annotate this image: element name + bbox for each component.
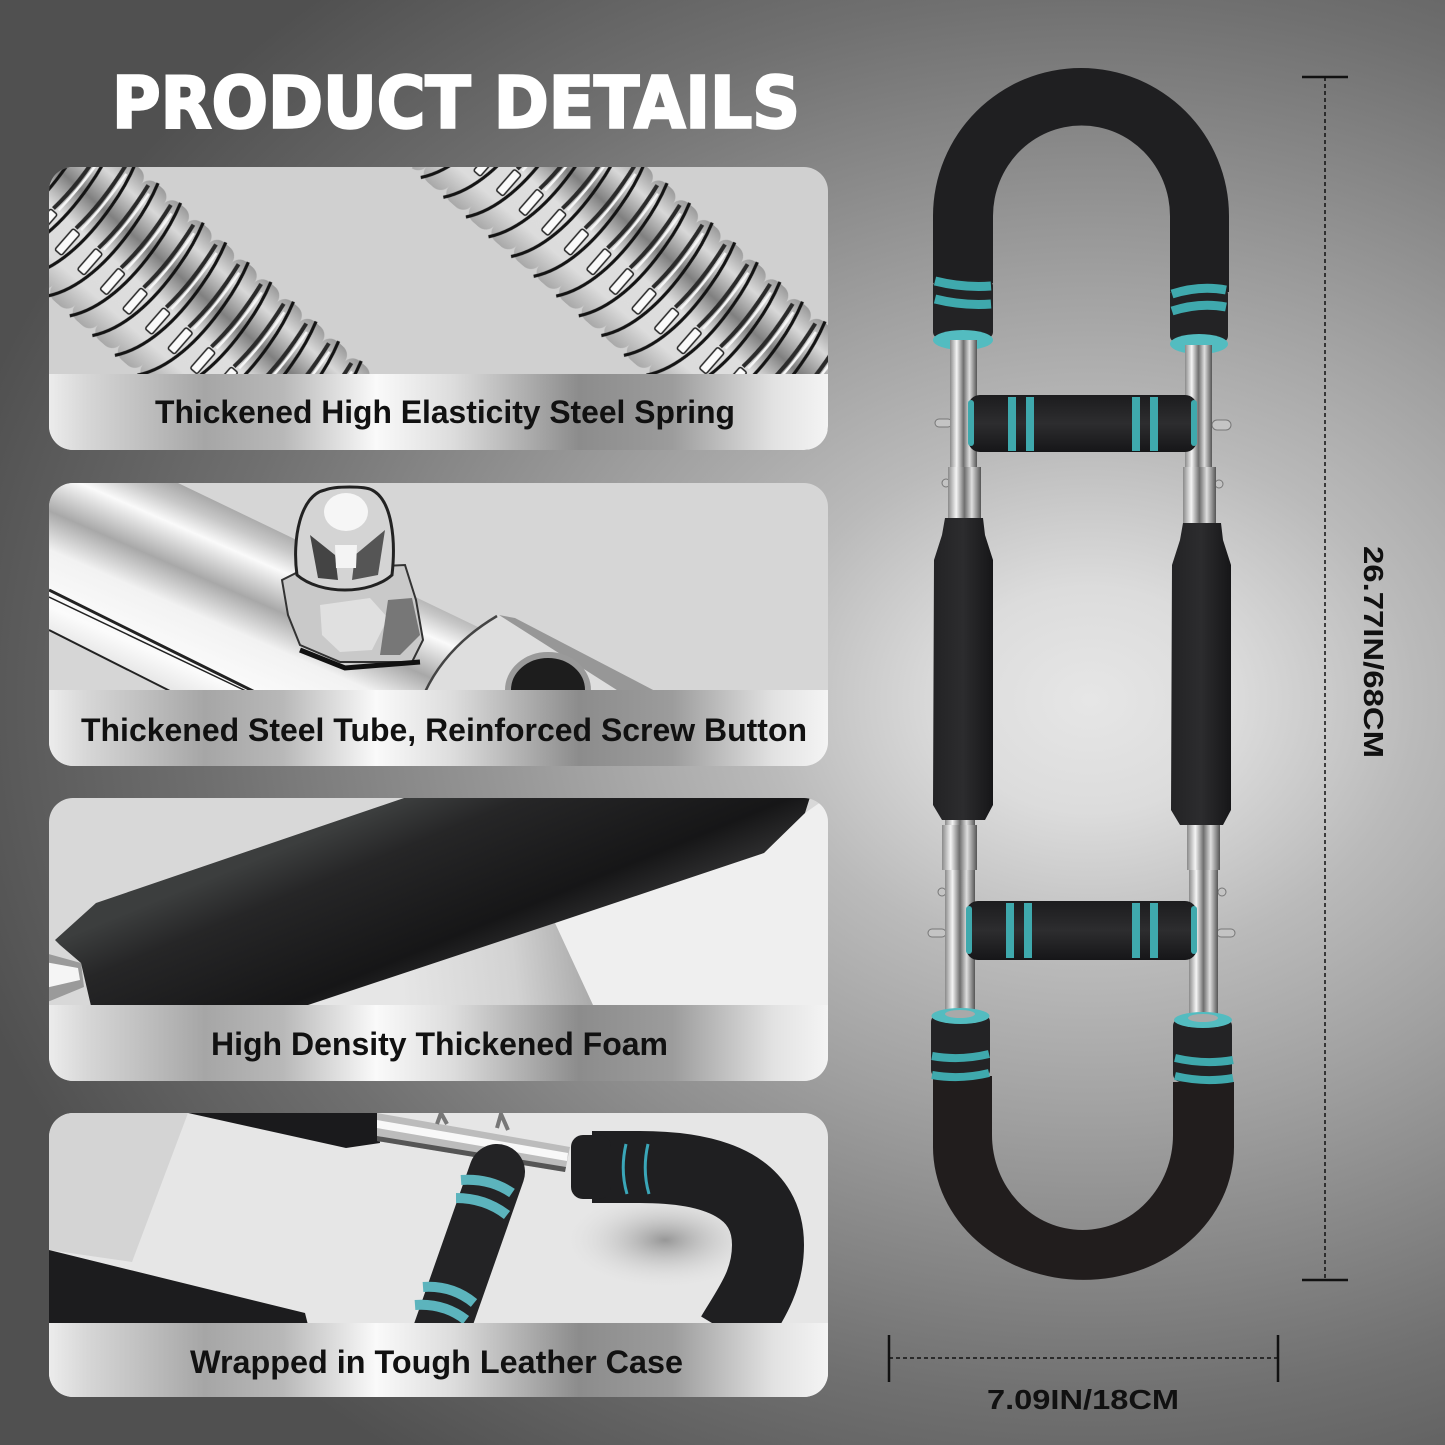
steel rod bbox=[377, 1113, 570, 1172]
left grip end bbox=[931, 1014, 990, 1078]
curved U-shaped foam handle bbox=[571, 1135, 768, 1335]
caption: foam: High Density Thickened Foam bbox=[211, 1026, 668, 1062]
label: height: 26.77IN/68CM bbox=[1358, 546, 1389, 758]
crossbar foam grip bbox=[415, 1172, 512, 1340]
steel tubes bbox=[942, 340, 1220, 1020]
right middle grip bbox=[1171, 523, 1231, 825]
label: width: 7.09IN/18CM bbox=[987, 1384, 1179, 1415]
right tube socket bbox=[1188, 1014, 1218, 1022]
panel: foam bbox=[45, 797, 828, 1081]
panel: steel spring bbox=[49, 167, 828, 450]
cast shadow bbox=[595, 1206, 732, 1274]
left tube socket bbox=[945, 1010, 975, 1018]
teal stripes bbox=[935, 281, 1226, 311]
area under grip bbox=[305, 920, 596, 1005]
panel: steel tube and screw bbox=[40, 483, 828, 766]
caption bar: leather bbox=[49, 1323, 828, 1397]
upper crossbar grip bbox=[968, 395, 1197, 452]
tube edge lines bbox=[49, 590, 255, 692]
icon: spring coil left bbox=[49, 167, 370, 374]
background fold bbox=[49, 1113, 188, 1262]
black grip bottom-left bbox=[49, 1250, 308, 1325]
lower crossbar grip bbox=[966, 901, 1197, 960]
teal stripes bbox=[415, 1180, 512, 1320]
panel: leather case bbox=[49, 1113, 828, 1397]
rod pins bbox=[437, 1113, 508, 1130]
black foam grip bbox=[55, 797, 810, 1006]
bottom U foam handle bbox=[931, 1008, 1234, 1280]
caption: leather: Wrapped in Tough Leather Case bbox=[190, 1344, 683, 1380]
icon: hex nut bbox=[282, 565, 423, 668]
steel rod bbox=[49, 954, 84, 1002]
top U foam handle bbox=[933, 68, 1229, 354]
teal stripes bbox=[932, 1054, 1233, 1080]
left middle grip bbox=[933, 518, 993, 820]
dimension: height bbox=[1302, 77, 1348, 1280]
right grip end bbox=[1173, 1018, 1232, 1082]
title: PRODUCT DETAILS bbox=[112, 62, 800, 144]
pins bbox=[928, 419, 1235, 937]
icon: acorn cap nut bbox=[296, 487, 393, 590]
steel tube bbox=[40, 483, 480, 692]
tube sleeve bbox=[428, 630, 479, 690]
dimension: width bbox=[889, 1335, 1278, 1382]
icon: spring coil right bbox=[412, 167, 828, 450]
caption bar: tube bbox=[49, 690, 828, 766]
light wedge bbox=[555, 797, 828, 1005]
caption bar: foam bbox=[49, 1005, 828, 1081]
left grip end bbox=[933, 280, 993, 338]
caption: tube: Thickened Steel Tube, Reinforced Screw Button bbox=[81, 712, 807, 748]
caption bar: spring bbox=[49, 374, 828, 450]
right grip end bbox=[1170, 288, 1228, 342]
tube sleeve seam bbox=[425, 616, 497, 692]
product: arm exerciser bbox=[928, 68, 1235, 1280]
teal thin rings bbox=[623, 1144, 649, 1194]
black grip top bbox=[188, 1113, 380, 1148]
icon: screw hole bbox=[505, 652, 591, 690]
caption: spring: Thickened High Elasticity Steel Spring bbox=[155, 394, 735, 430]
